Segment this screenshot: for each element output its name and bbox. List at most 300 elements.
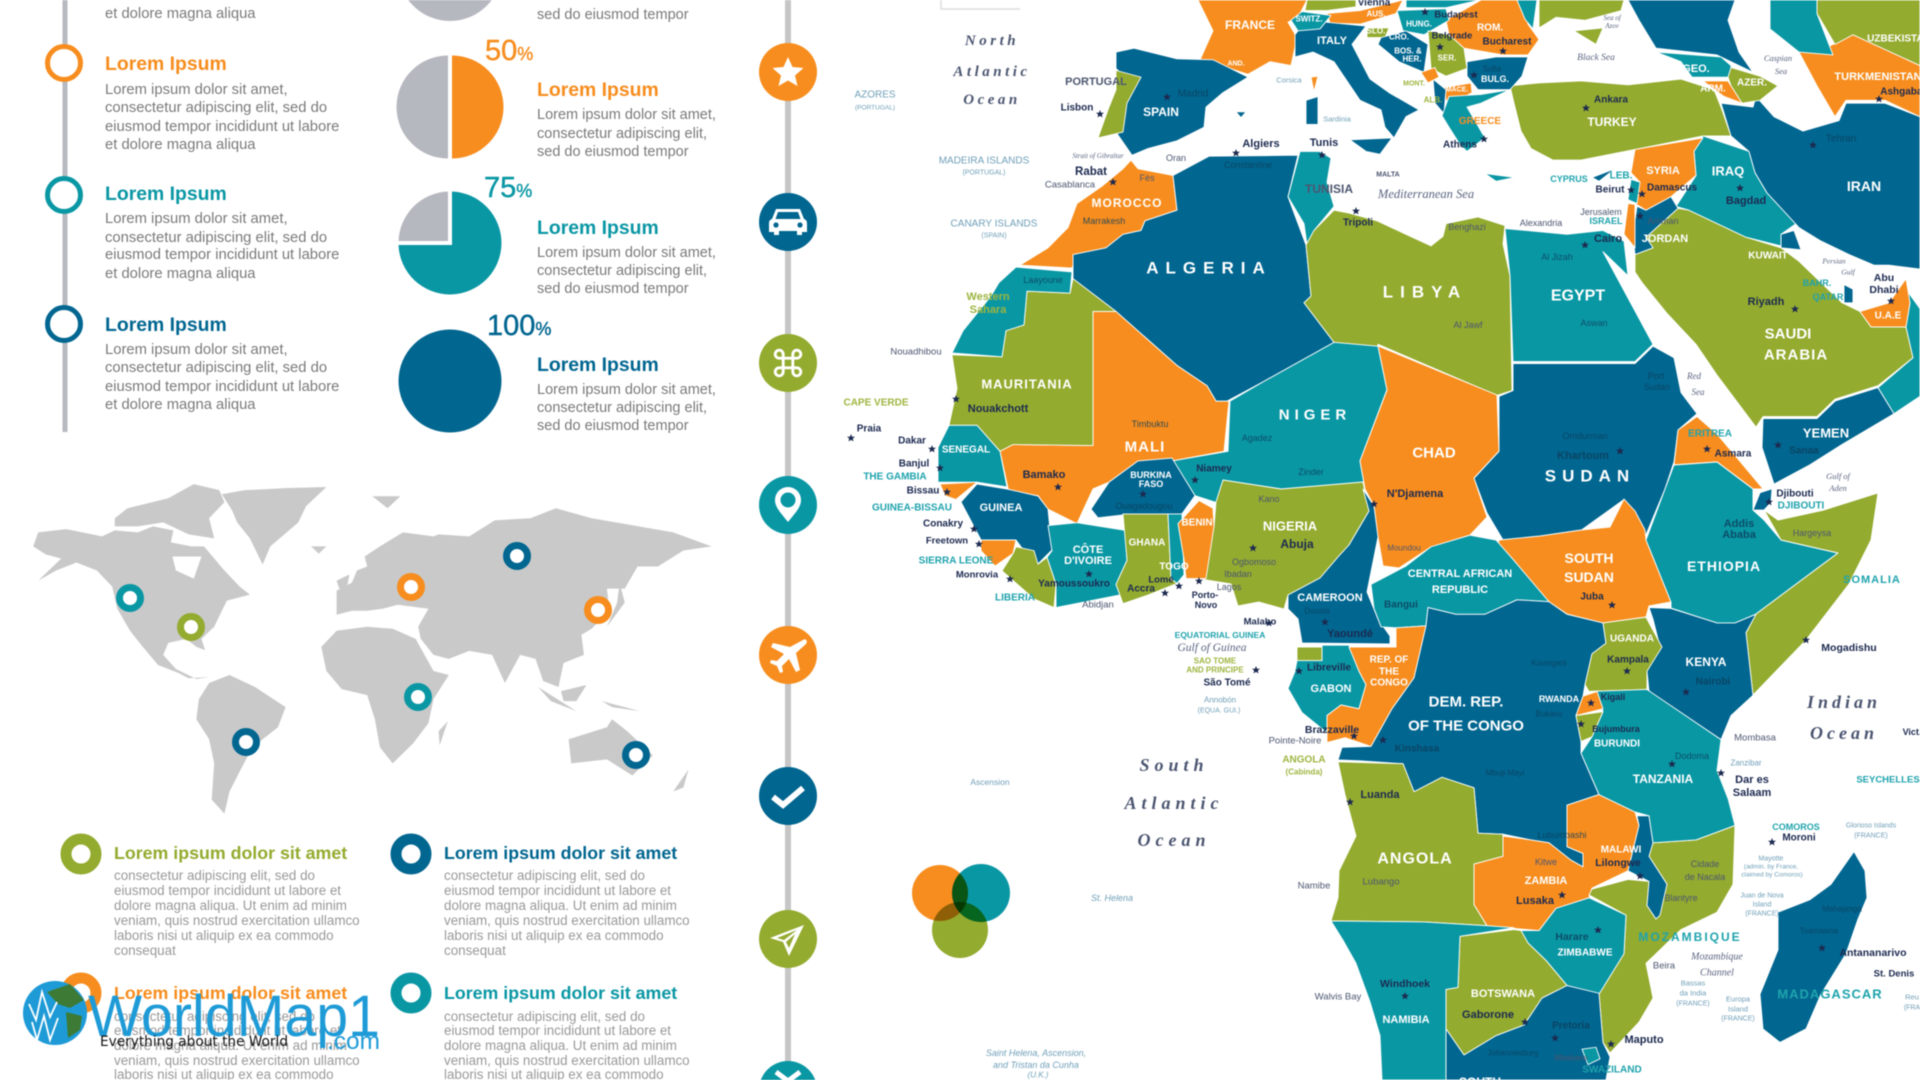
map: island labels: Ascension	[970, 777, 1010, 787]
map: olive labels: Sahara	[970, 304, 1007, 316]
map: bold city labels: Tunis	[1310, 137, 1338, 149]
text: 50 percent block	[537, 79, 716, 160]
legend: orange: dolore magna aliqua. Ut enim ad minim	[114, 1038, 347, 1053]
timeline item: blue: Lorem Ipsum	[105, 314, 227, 336]
label: 100 percent: 100%	[487, 310, 551, 342]
map: bold city labels: Lisbon	[1061, 102, 1093, 114]
map: country labels: NIGER	[1279, 406, 1351, 424]
map: bold city labels: N'Djamena	[1387, 488, 1444, 500]
map: bold city labels: Accra	[1127, 584, 1155, 594]
map: bold city labels: Lomé	[1148, 574, 1174, 586]
map: dim city labels on dark countries: Dodoma	[1675, 751, 1709, 761]
map: country labels: BURUNDI	[1594, 738, 1640, 750]
icon: location pin	[759, 476, 817, 534]
text: 100 percent block: Lorem Ipsum	[537, 354, 659, 376]
text: 100 percent block: Lorem ipsum dolor sit amet,	[537, 382, 716, 398]
text: 100 percent block: sed do eiusmod tempor	[537, 418, 689, 434]
map: sea labels: Persian	[1821, 256, 1846, 266]
legend: teal: veniam, quis nostrud exercitation ullamco	[444, 1053, 690, 1068]
map: island labels: (FRANCE)	[1676, 1000, 1710, 1008]
timeline item: blue: consectetur adipiscing elit, sed do	[105, 360, 327, 376]
timeline item: orange: Lorem ipsum dolor sit amet,	[105, 82, 288, 98]
map: country labels: REPUBLIC	[1432, 584, 1488, 596]
map: teal labels: BAHR.	[1803, 278, 1831, 288]
map: country labels: BENIN	[1181, 518, 1213, 528]
map: teal labels: DJIBOUTI	[1778, 500, 1825, 512]
map: ocean labels: South	[1139, 755, 1209, 775]
map: country labels: TANZANIA	[1633, 772, 1694, 786]
map: bold city labels: Gaborone	[1462, 1009, 1514, 1021]
icon timeline	[759, 0, 817, 1080]
map: island labels: (SPAIN)	[981, 232, 1007, 240]
map: bold city labels: Kigali	[1601, 692, 1625, 702]
map: country labels: MAURITANIA	[981, 376, 1073, 392]
map: grey city labels: Namibe	[1298, 880, 1330, 892]
logo tagline: Everything about the World	[100, 1034, 288, 1050]
map: grey city labels: Mbabane	[1554, 1054, 1588, 1062]
map: island labels: (admin. by France,	[1744, 864, 1798, 870]
map: country labels: JORDAN	[1642, 233, 1688, 245]
map: teal labels: ERITREA	[1688, 428, 1732, 440]
map: country labels: RWANDA	[1539, 694, 1580, 704]
map: country labels: ITALY	[1317, 35, 1348, 47]
map: capital city stars	[847, 8, 1895, 1047]
map: dim city labels on dark countries: Kisangani	[1531, 658, 1567, 668]
map: teal labels	[863, 170, 1920, 1076]
legend: olive: laboris nisi ut aliquip ex ea commodo	[114, 928, 334, 943]
map: grey city labels: Kano	[1258, 494, 1280, 504]
map: bold city labels: Antananarivo	[1839, 947, 1907, 959]
map: teal labels: SIERRA LEONE	[919, 556, 994, 566]
map: country labels: GUINEA	[980, 502, 1022, 514]
map: dim city labels on dark countries: Bukavu	[1536, 710, 1562, 718]
map: bold city labels: Budapest	[1434, 10, 1478, 20]
map: island labels: St. Helena	[1091, 893, 1133, 903]
map: island labels: (PORTUGAL)	[962, 170, 1006, 176]
map: dim city labels on dark countries: Bangui	[1384, 600, 1418, 610]
text: 75 percent block: Lorem ipsum dolor sit amet,	[537, 245, 716, 261]
map: country labels	[942, 10, 1920, 1080]
legend: blue: consequat	[444, 943, 506, 958]
map: bold city labels: Bissau	[907, 486, 939, 496]
map: sea labels: Aden	[1828, 483, 1847, 493]
icon: bottom teal circle	[759, 1061, 817, 1080]
map: country labels: EGYPT	[1551, 288, 1605, 304]
map: bold city labels: Novo	[1195, 600, 1218, 610]
icon: star	[759, 43, 817, 101]
map: bold city labels: Dhabi	[1869, 284, 1899, 296]
map: island labels: MADEIRA ISLANDS	[939, 156, 1030, 166]
legend: blue: dolore magna aliqua. Ut enim ad minim	[444, 898, 677, 913]
legend: olive: consequat	[114, 943, 176, 958]
map: island labels: and Tristan da Cunha	[993, 1060, 1079, 1070]
map: country labels: CRO.	[1389, 32, 1409, 42]
map: country labels: GABON	[1311, 683, 1352, 695]
map: country labels: SPAIN	[1143, 105, 1179, 119]
map: bold city labels: Banjul	[899, 458, 929, 470]
map: island labels: (PORTUGAL)	[855, 104, 895, 112]
map: bold city labels: Asmara	[1715, 448, 1752, 460]
map: country labels: BURKINA	[1130, 470, 1172, 480]
map: country labels: CÔTE	[1073, 543, 1103, 556]
map: central countries	[961, 346, 1878, 695]
legend: blue: consectetur adipiscing elit, sed do	[444, 868, 645, 883]
map: greece label: GREECE	[1459, 116, 1501, 127]
logo wordmark: WorldMap1	[88, 984, 380, 1049]
map: bold city labels: Praia	[857, 424, 882, 434]
legend: olive: dolore magna aliqua. Ut enim ad minim	[114, 898, 347, 913]
map: country labels: SOUTH	[1564, 550, 1614, 566]
timeline item: orange: eiusmod tempor incididunt ut labore	[105, 119, 339, 135]
map: sea labels	[1072, 14, 1856, 978]
map: country labels: SLO.	[1367, 26, 1385, 36]
map: bold city labels: São Tomé	[1203, 678, 1251, 688]
map: teal labels: ISRAEL	[1589, 216, 1623, 226]
map: country labels: TURKMENISTAN	[1834, 71, 1920, 83]
map: country labels: MOROCCO	[1092, 196, 1162, 210]
map: dim city labels on dark countries: Al Jizah	[1541, 252, 1573, 262]
map: country labels: SAUDI	[1765, 326, 1811, 342]
map: bold city labels: Mogadishu	[1821, 642, 1877, 654]
icon: car	[759, 193, 817, 251]
map: island labels: Bassas	[1681, 978, 1706, 988]
map: olive labels: Western	[966, 291, 1010, 303]
timeline item: orange	[48, 46, 339, 153]
legend: teal	[396, 978, 690, 1080]
map: country labels: YEMEN	[1803, 426, 1849, 440]
text: 75 percent block: sed do eiusmod tempor	[537, 281, 689, 297]
map: dim city labels on dark countries: Pretoria	[1552, 1020, 1590, 1032]
map: country labels: BULG.	[1481, 74, 1509, 84]
map: island labels: claimed by Comoros)	[1741, 872, 1803, 878]
map: country labels: KUWAIT	[1748, 250, 1788, 262]
map: bold city labels: Beirut	[1596, 184, 1625, 196]
legend: olive	[66, 839, 360, 958]
map: country labels: CONGO	[1370, 678, 1408, 688]
map: country labels: REP. OF	[1370, 654, 1408, 666]
map: bold city labels: Lusaka	[1516, 895, 1555, 907]
map: dim city labels on dark countries: Douala	[1304, 606, 1330, 616]
timeline item: blue: eiusmod tempor incididunt ut labore	[105, 379, 339, 395]
map: grey city labels: PORTUGAL	[1065, 76, 1127, 88]
map: island labels: Zanzibar	[1730, 758, 1762, 768]
map: island labels: Saint Helena, Ascension,	[986, 1048, 1086, 1058]
map: country labels: AZER.	[1737, 78, 1767, 88]
legend: orange: veniam, quis nostrud exercitation ullamco	[114, 1053, 360, 1068]
map: olive labels: ALB.	[1424, 96, 1442, 104]
map: grey city labels: Benghazi	[1448, 222, 1486, 232]
map: bold city labels: Malabo	[1244, 616, 1277, 628]
map: grey city labels: Casablanca	[1045, 180, 1096, 190]
map: bold city labels: Cairo	[1594, 233, 1622, 245]
map: country labels: ROM.	[1477, 22, 1503, 34]
map: bold city labels: Bamako	[1023, 469, 1066, 481]
map: country labels: CAMEROON	[1297, 592, 1363, 604]
legend: orange: consectetur adipiscing elit, sed do	[114, 1009, 315, 1024]
map: ocean labels: Atlantic	[1123, 793, 1224, 813]
map: bold city labels: Yaoundé	[1327, 628, 1373, 640]
map: ocean labels: North	[964, 33, 1019, 49]
map: bold city labels: Athens	[1443, 140, 1477, 150]
text: 75 percent block: consectetur adipiscing elit,	[537, 263, 707, 279]
map: sea labels: Sea	[1692, 387, 1705, 397]
map: ocean labels	[952, 33, 1881, 850]
map: bold city labels: Bucharest	[1483, 36, 1532, 48]
timeline item: blue	[48, 308, 339, 413]
map: ocean labels: Ocean	[963, 92, 1021, 108]
legend: blue	[396, 839, 690, 958]
map: country labels: NIGERIA	[1263, 518, 1318, 534]
map: ocean labels: Ocean	[1810, 723, 1878, 743]
map: ocean labels: Ocean	[1138, 830, 1210, 850]
text: 100 percent block: consectetur adipiscing elit,	[537, 400, 707, 416]
map: olive labels	[843, 80, 1442, 776]
map: sea labels: Azov	[1604, 22, 1620, 30]
map: teal labels: QATAR	[1813, 292, 1844, 302]
timeline vertical line	[62, 0, 68, 432]
map: southern countries	[981, 500, 1867, 1080]
map: sea labels: Gulf of Guinea	[1178, 642, 1247, 654]
map: bold city labels: Dar es	[1735, 774, 1769, 786]
map: country labels: CHAD	[1412, 444, 1456, 462]
map: grey city labels: Nouadhibou	[890, 346, 942, 358]
map: olive labels: MONT.	[1403, 80, 1425, 88]
map: dim city labels on dark countries: Sofia	[1483, 64, 1502, 74]
map: island labels: Sardinia	[1323, 114, 1352, 124]
map: dim city labels on dark countries: Toamasina	[1800, 926, 1839, 936]
map: country labels: LIBYA	[1383, 282, 1467, 302]
text: 100 percent block	[537, 354, 716, 434]
map: country labels: BOS. &	[1394, 46, 1422, 56]
map: country labels: SWITZ.	[1295, 14, 1323, 24]
map: grey city labels: Walvis Bay	[1315, 992, 1362, 1002]
map: island labels: Corsica	[1276, 76, 1303, 84]
map: country labels: HUNG.	[1406, 20, 1432, 28]
map: ocean labels: Indian	[1806, 692, 1881, 712]
icon timeline line	[785, 0, 791, 1080]
map: grey city labels: TUNISIA	[1305, 182, 1353, 196]
map: bold city labels: Freetown	[926, 536, 968, 546]
map: country labels: NAMIBIA	[1382, 1014, 1430, 1026]
map: grey city labels: MALTA	[1376, 172, 1400, 178]
map: bold city labels: Riyadh	[1748, 296, 1785, 308]
panel: timeline list	[48, 0, 339, 432]
map: country labels: FRANCE	[1225, 18, 1275, 32]
map: country labels: HER.	[1402, 54, 1422, 64]
map: island labels: Island	[1753, 902, 1771, 908]
map: sea labels: Caspian	[1764, 53, 1792, 63]
map: dim city labels on dark countries: Sudan	[1644, 382, 1670, 392]
map: dim city labels on dark countries: Sanaa	[1789, 446, 1819, 456]
timeline item: teal: eiusmod tempor incididunt ut labore	[105, 247, 339, 263]
text: top fragment: sed do eiusmod tempor	[537, 7, 689, 23]
timeline item: teal	[48, 178, 339, 282]
map: country labels: SENEGAL	[942, 444, 990, 456]
map: teal labels: LEB.	[1610, 170, 1633, 182]
map: grey city labels: Lubango	[1363, 876, 1399, 888]
timeline item: blue: et dolore magna aliqua	[105, 397, 256, 413]
map: country labels: ARABIA	[1764, 346, 1828, 364]
map: bold city labels: Yamoussoukro	[1038, 578, 1110, 590]
map: bold city labels: Monrovia	[956, 570, 999, 580]
map: bold city labels: Abu	[1874, 272, 1894, 284]
map: bold city labels: Nouakchott	[968, 403, 1029, 415]
map: bold city labels: Salaam	[1733, 787, 1771, 799]
map: grey city labels: de Nacala	[1685, 872, 1725, 882]
map: country labels: MALI	[1125, 438, 1165, 456]
map: country labels: IRAN	[1847, 178, 1881, 194]
map: country labels: SUDAN	[1564, 569, 1614, 585]
map: country labels: ALGERIA	[1146, 258, 1272, 278]
map: sea labels: Black Sea	[1577, 53, 1615, 63]
icon: paper plane	[759, 910, 817, 968]
text: 50 percent block: Lorem ipsum dolor sit amet,	[537, 107, 716, 123]
map: island labels: Mayotte	[1759, 856, 1784, 862]
map: country labels: GHANA	[1129, 538, 1165, 548]
map: dim city labels on dark countries: Khartoum	[1557, 450, 1609, 462]
map: bold city labels: Ankara	[1594, 94, 1628, 106]
text: 75 percent block	[537, 217, 716, 297]
map: grey city labels: Mombasa	[1734, 732, 1777, 744]
map: northern countries	[938, 0, 1920, 540]
map: island labels: da India	[1680, 988, 1707, 998]
map: grey city labels: Cidade	[1691, 859, 1719, 869]
map: grey city labels: Oran	[1166, 153, 1186, 163]
map: teal labels: LIBERIA	[995, 592, 1035, 604]
map: dim city labels on dark countries: Kinshasa	[1395, 744, 1440, 754]
legend: teal: eiusmod tempor incididunt ut labore et	[444, 1023, 671, 1038]
map: teal labels: EQUATORIAL GUINEA	[1175, 630, 1265, 640]
map: country labels: TURKEY	[1587, 115, 1637, 129]
map: sea labels: Gulf	[1841, 268, 1856, 276]
map: country labels: TOGO	[1159, 562, 1189, 572]
pie: 50 percent	[396, 56, 504, 158]
legend: olive: veniam, quis nostrud exercitation ullamco	[114, 913, 360, 928]
map: teal labels: CYPRUS	[1550, 174, 1588, 184]
map: bold city labels: Brazzaville	[1305, 724, 1359, 736]
map: teal labels: THE GAMBIA	[863, 472, 927, 482]
map: bold city labels: Rabat	[1075, 166, 1107, 178]
map: bold city labels: Belgrade	[1432, 30, 1472, 42]
logo globe	[23, 981, 87, 1045]
map: dim city labels on dark countries: Aswan	[1580, 318, 1608, 328]
map: island labels: Annobón	[1204, 696, 1236, 704]
map: bold city labels: Abuja	[1280, 537, 1314, 551]
text: 50 percent block: sed do eiusmod tempor	[537, 144, 689, 160]
map: olive labels: (Cabinda)	[1286, 768, 1323, 776]
map: grey city labels: Jerusalem	[1580, 207, 1622, 217]
map: island labels: (FRANCE)	[1745, 910, 1779, 918]
text: 75 percent block: Lorem Ipsum	[537, 217, 659, 239]
map: country labels: DEM. REP.	[1429, 694, 1503, 710]
map: sea labels: Mozambique	[1690, 952, 1743, 962]
map: country labels: THE	[1379, 666, 1399, 678]
legend: blue: eiusmod tempor incididunt ut labore et	[444, 883, 671, 898]
map: dim city labels on dark countries: Laayoune	[1023, 275, 1063, 285]
timeline item: orange: Lorem Ipsum	[105, 53, 227, 75]
pie: top fragment	[398, 0, 502, 21]
map: grey city labels: Fès	[1139, 173, 1155, 183]
text: 50 percent block: consectetur adipiscing elit,	[537, 126, 707, 142]
map: bold city labels: Damascus	[1647, 182, 1697, 194]
legend: blue: veniam, quis nostrud exercitation ullamco	[444, 913, 690, 928]
map: country labels: ETHIOPIA	[1687, 558, 1761, 574]
map: bold city labels: Bujumbura	[1592, 724, 1641, 734]
map: dim city labels on dark countries	[1023, 64, 1862, 1058]
map: country labels: CENTRAL AFRICAN	[1408, 568, 1512, 580]
timeline item: orange: et dolore magna aliqua	[105, 137, 256, 153]
timeline item: teal: Lorem Ipsum	[105, 183, 227, 205]
map: teal labels: MADAGASCAR	[1777, 986, 1883, 1002]
map: dim city labels on dark countries: Constantine	[1224, 160, 1272, 170]
map: country labels: GEO.	[1682, 63, 1710, 75]
map: grey city labels: Alexandria	[1520, 218, 1562, 228]
map: country labels: ZIMBABWE	[1558, 948, 1613, 958]
map: sea labels: Strait of Gibraltar	[1072, 152, 1124, 160]
map: island labels: (FRA	[1904, 1004, 1920, 1012]
timeline item: teal: consectetur adipiscing elit, sed do	[105, 230, 327, 246]
map: dim city labels on dark countries: Port	[1648, 371, 1665, 381]
map: bold city labels: Porto-	[1192, 590, 1218, 600]
map: olive labels: CAPE VERDE	[843, 398, 909, 408]
map: dim city labels on dark countries: Ababa	[1722, 529, 1757, 541]
map: dim city labels on dark countries: Nairobi	[1696, 676, 1730, 688]
map: grey city labels: Pointe-Noire	[1269, 736, 1321, 746]
map: country labels: MACE.	[1446, 86, 1468, 94]
map: island labels: AZORES	[854, 90, 896, 100]
watermark logo	[23, 981, 380, 1055]
map: bold city labels: Niamey	[1196, 464, 1232, 474]
map: olive labels: AND PRINCIPE	[1186, 666, 1244, 674]
map: dim city labels on dark countries: Marrakesh	[1083, 216, 1125, 226]
timeline item: orange: consectetur adipiscing elit, sed do	[105, 100, 327, 116]
map: island labels: (U.K.)	[1028, 1070, 1049, 1080]
map: teal labels: SOMALIA	[1843, 574, 1901, 586]
map: grey city labels: Ogbomoso	[1232, 557, 1276, 567]
map: country labels: IRAQ	[1712, 164, 1744, 178]
top text fragment: et dolore magna aliqua	[105, 6, 256, 22]
map: island labels: Reu	[1905, 992, 1919, 1002]
map: grey city labels	[890, 76, 1831, 1062]
pie: 75 percent	[398, 192, 501, 294]
map: island labels: (EQUA. GUI.)	[1198, 708, 1240, 714]
map: teal labels: COMOROS	[1772, 822, 1820, 832]
timeline item: teal: et dolore magna aliqua	[105, 266, 256, 282]
map: grey city labels: Blantyre	[1664, 893, 1698, 903]
map: grey city labels: Lagos	[1217, 582, 1242, 592]
map: dim city labels on dark countries: Agadez	[1242, 433, 1273, 443]
map: country labels: KENYA	[1686, 655, 1727, 669]
map: bold city labels: Algiers	[1242, 138, 1280, 150]
map: grey city labels: Moundou	[1387, 544, 1421, 552]
map: dim city labels on dark countries: Mbuji-Mayi	[1486, 768, 1525, 778]
map: dim city labels on dark countries: Madrid	[1178, 88, 1208, 100]
map: dim city labels on dark countries: Addis	[1724, 518, 1754, 530]
map: country labels: FASO	[1139, 479, 1163, 489]
map: country labels: SUDAN	[1545, 466, 1635, 486]
map: dim city labels on dark countries: Timbuktu	[1132, 419, 1168, 429]
map: island labels: Island	[1728, 1004, 1748, 1014]
map: dim city labels on dark countries: Zinder	[1298, 467, 1324, 477]
map: dim city labels on dark countries: Ouagadougou	[1115, 501, 1173, 511]
map: country labels: OF THE CONGO	[1408, 718, 1524, 734]
map: bold city labels: Libreville	[1307, 662, 1351, 674]
map: ocean labels: Atlantic	[952, 64, 1031, 80]
icon: airplane	[759, 626, 817, 684]
legend: orange: Lorem ipsum dolor sit amet	[114, 983, 347, 1003]
decorative overlapping circles	[912, 864, 1010, 958]
map: teal labels: SEYCHELLES	[1856, 774, 1920, 786]
